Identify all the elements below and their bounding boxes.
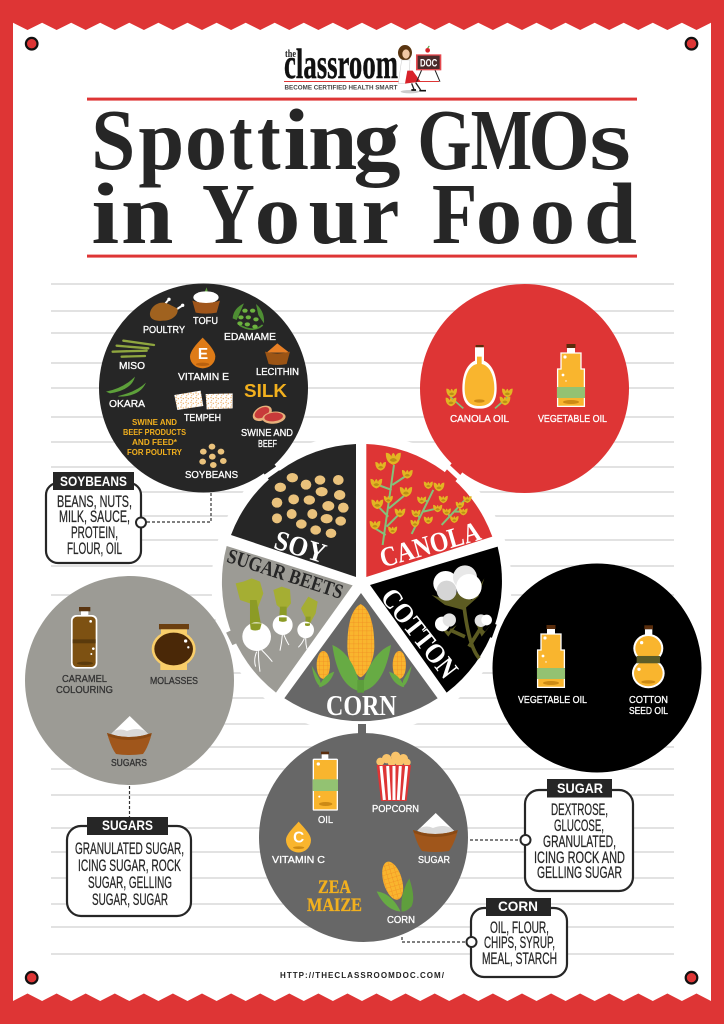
item: caramel colouring: [56, 607, 113, 696]
text: swine and beef products note: FOR POULTRY: [127, 448, 183, 457]
item: swine and beef: [241, 402, 293, 450]
item: sugar: SUGAR: [418, 855, 450, 866]
item: soybeans: [185, 444, 238, 481]
item: vitamin C: C: [293, 830, 304, 847]
item: poultry: POULTRY: [143, 325, 185, 336]
callout: sugar: GLUCOSE,: [554, 817, 604, 835]
title: p: [138, 91, 184, 188]
callout: sugars: [67, 786, 191, 916]
title: O: [528, 91, 590, 188]
logo: the classroom doc: BECOME CERTIFIED HEALTH SMART: [284, 86, 398, 92]
item: swine and beef: BEEF: [258, 439, 277, 450]
item: molasses: MOLASSES: [150, 676, 198, 687]
callout: sugars: GRANULATED SUGAR,: [75, 840, 184, 858]
ruled background lines: [51, 284, 674, 954]
connector stubs: [220, 464, 505, 736]
title: t: [229, 91, 253, 188]
item: vegetable oil: VEGETABLE OIL: [518, 695, 587, 706]
callout: soybeans: MILK, SAUCE,: [59, 508, 130, 526]
title: n: [121, 165, 173, 262]
text: swine and beef products note: BEEF PRODUCTS: [123, 428, 187, 437]
item: vegetable oil: [538, 344, 607, 425]
item: edamame: [224, 303, 276, 343]
title: Y: [202, 165, 255, 262]
callout: soybeans: [46, 472, 211, 563]
top rule: [87, 98, 637, 101]
callout: corn: MEAL, STARCH: [482, 950, 557, 968]
callout: soybeans: FLOUR, OIL: [67, 540, 122, 558]
wedge: corn: CORN: [326, 691, 397, 722]
item: tofu: [192, 287, 220, 327]
callout: corn: [402, 898, 567, 977]
callout: sugar: [470, 779, 633, 891]
callout: soybeans: BEANS, NUTS,: [57, 493, 132, 511]
item: tempeh: [174, 391, 233, 424]
callout: corn: CHIPS, SYRUP,: [484, 934, 555, 952]
callout: sugars: SUGAR, SUGAR: [92, 891, 168, 909]
item: oil: OIL: [318, 815, 333, 826]
title: M: [471, 91, 532, 188]
callout: corn: OIL, FLOUR,: [490, 919, 549, 937]
segmented wheel: [222, 444, 502, 722]
callout: sugar: DEXTROSE,: [551, 801, 608, 819]
bottom rule: [87, 255, 637, 258]
item: tofu: TOFU: [193, 316, 218, 327]
title: r: [362, 165, 398, 262]
item: sugars: [107, 716, 152, 769]
item: popcorn: [372, 752, 419, 815]
white halo around wheel: [212, 434, 512, 734]
text: zea maize: [307, 878, 362, 916]
item: popcorn: POPCORN: [372, 804, 419, 815]
item: lecithin: [256, 343, 299, 378]
wedge: soy: [231, 444, 356, 577]
text: swine and beef products note: [123, 418, 187, 457]
title: u: [308, 165, 359, 262]
title: G: [417, 91, 472, 188]
title: i: [91, 165, 119, 262]
item: soybeans: SOYBEANS: [185, 470, 238, 481]
item: sugars: SUGARS: [111, 758, 147, 769]
item: vegetable oil: [518, 625, 587, 706]
title: s: [589, 91, 631, 188]
item: okara: [106, 377, 146, 410]
callout: sugar: GELLING SUGAR: [537, 864, 622, 882]
panel: corn circle: [259, 733, 468, 942]
item: caramel colouring: CARAMEL: [62, 674, 107, 685]
item: tempeh: TEMPEH: [184, 413, 221, 424]
title: F: [432, 165, 477, 262]
item: lecithin: LECITHIN: [256, 367, 299, 378]
callout: sugar: GRANULATED,: [543, 833, 616, 851]
wedge: soy: SOY: [271, 525, 330, 570]
item: cotton seed oil: SEED OIL: [629, 706, 668, 717]
callout: sugar: SUGAR: [557, 780, 603, 796]
item: vitamin C: VITAMIN C: [272, 855, 325, 866]
item: miso: MISO: [119, 361, 145, 372]
title: o: [530, 165, 575, 262]
callout: soybeans: PROTEIN,: [71, 524, 118, 542]
item: vitamin E: E: [198, 346, 208, 363]
panel: cotton circle: [492, 564, 702, 772]
title: S: [91, 91, 135, 188]
wedge: cotton: [370, 547, 502, 693]
panel: soybeans circle: [99, 284, 308, 492]
title: d: [584, 165, 637, 262]
text: zea maize: ZEA: [318, 878, 352, 898]
panel: sugar beets circle: [25, 576, 234, 785]
item: canola oil: [446, 345, 513, 425]
item: canola oil: CANOLA OIL: [450, 414, 509, 425]
wedge: canola: CANOLA: [376, 516, 484, 574]
item: corn: [377, 859, 415, 926]
callout: sugars: ICING SUGAR, ROCK: [78, 857, 181, 875]
title: o: [185, 91, 227, 188]
item: caramel colouring: COLOURING: [56, 685, 113, 696]
item: cotton seed oil: [629, 625, 668, 717]
text: zea maize: MAIZE: [307, 896, 362, 916]
wedge: cotton: COTTON: [374, 583, 464, 685]
item: sugar: [413, 813, 458, 866]
item: poultry: [143, 298, 185, 336]
item: edamame: EDAMAME: [224, 332, 276, 343]
wedge: canola: [366, 444, 492, 577]
callout: sugars: SUGAR, GELLING: [88, 874, 172, 892]
item: swine and beef: SWINE AND: [241, 428, 293, 439]
text: silk: SILK: [244, 381, 287, 401]
text: swine and beef products note: SWINE AND: [132, 418, 177, 427]
title: n: [308, 91, 357, 188]
title: o: [476, 165, 522, 262]
panel: canola circle: [420, 284, 629, 493]
title: g: [353, 91, 401, 188]
wedge: sugar beets: [222, 545, 353, 693]
title: o: [255, 165, 300, 262]
item: vitamin C: [272, 822, 325, 866]
callout: corn: CORN: [498, 898, 538, 914]
callout: sugar: ICING ROCK AND: [534, 849, 625, 867]
title: t: [257, 91, 281, 188]
item: vitamin E: [178, 338, 229, 383]
logo: the classroom doc: classroom: [284, 42, 398, 88]
item: cotton seed oil: COTTON: [629, 695, 668, 706]
wedge: sugar beets: SUGAR BEETS: [224, 545, 346, 604]
logo: the classroom doc: DOC: [420, 58, 437, 70]
title: i: [284, 91, 309, 188]
item: vitamin E: VITAMIN E: [178, 372, 229, 383]
logo: the classroom doc: the: [285, 48, 296, 60]
source url: HTTP://THECLASSROOMDOC.COM/: [280, 971, 445, 980]
title: [91, 91, 637, 262]
item: okara: OKARA: [109, 399, 145, 410]
item: oil: [313, 752, 338, 826]
item: vegetable oil: VEGETABLE OIL: [538, 414, 607, 425]
item: molasses: [150, 624, 198, 687]
item: corn: CORN: [387, 915, 415, 926]
wedge: corn: [284, 593, 438, 722]
item: miso: [113, 341, 154, 372]
text: swine and beef products note: AND FEED*: [132, 438, 178, 447]
callout: soybeans: SOYBEANS: [60, 473, 127, 489]
callout: sugars: SUGARS: [102, 817, 153, 833]
